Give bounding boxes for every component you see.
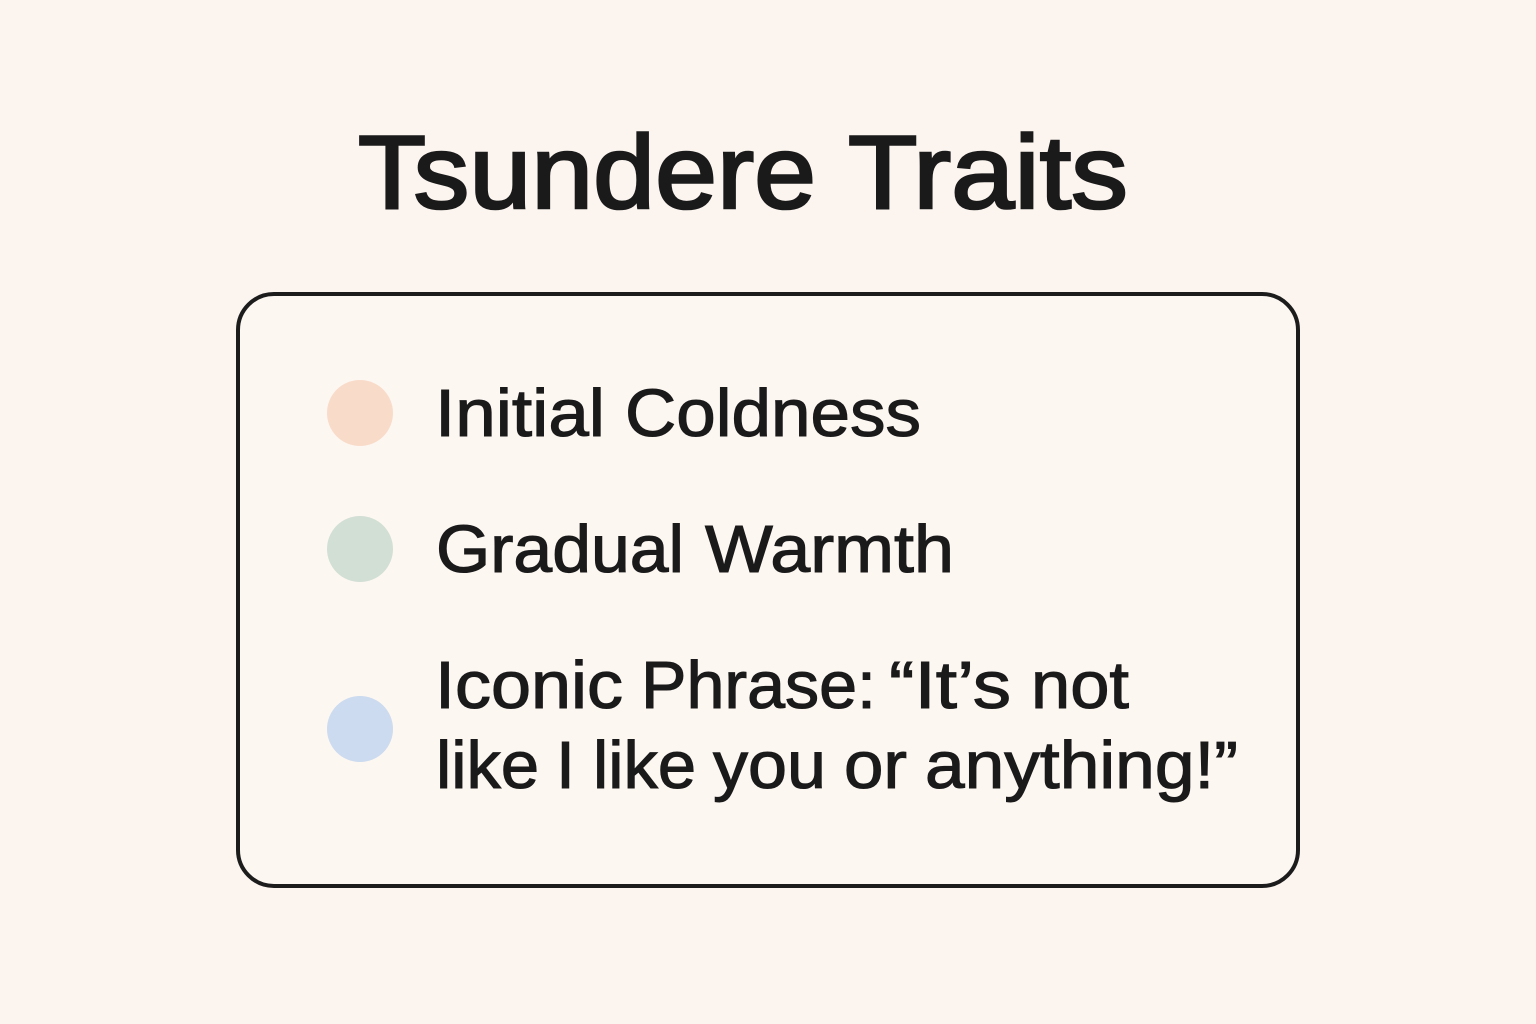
label: iconic phrase: you	[713, 728, 826, 803]
label: iconic phrase	[435, 648, 1238, 803]
label: iconic phrase: Phrase:	[641, 648, 876, 723]
icon: peach dot	[327, 380, 393, 446]
label: iconic phrase: not	[1031, 648, 1129, 723]
label: gradual warmth: Gradual	[436, 512, 684, 587]
label: gradual warmth: Warmth	[705, 512, 954, 587]
icon: sage dot	[327, 516, 393, 582]
label: iconic phrase: or	[844, 728, 907, 803]
label: iconic phrase: like	[436, 728, 539, 803]
label: iconic phrase: like	[593, 728, 696, 803]
icon: blue dot	[327, 696, 393, 762]
label: iconic phrase: “It’s	[889, 648, 1011, 723]
label: initial coldness	[435, 376, 921, 451]
label: initial coldness: Coldness	[625, 376, 921, 451]
trait: initial coldness	[327, 376, 921, 451]
title: Tsundere	[358, 115, 816, 231]
trait: gradual warmth	[327, 512, 954, 587]
label: gradual warmth	[436, 512, 954, 587]
title	[358, 115, 1128, 231]
trait: iconic phrase	[327, 648, 1238, 803]
panel: traits list	[238, 294, 1298, 886]
label: initial coldness: Initial	[435, 376, 605, 451]
title: Traits	[848, 115, 1128, 231]
panel border	[238, 294, 1298, 886]
label: iconic phrase: Iconic	[435, 648, 623, 723]
label: iconic phrase: anything!”	[925, 728, 1238, 803]
label: iconic phrase: I	[556, 728, 575, 803]
